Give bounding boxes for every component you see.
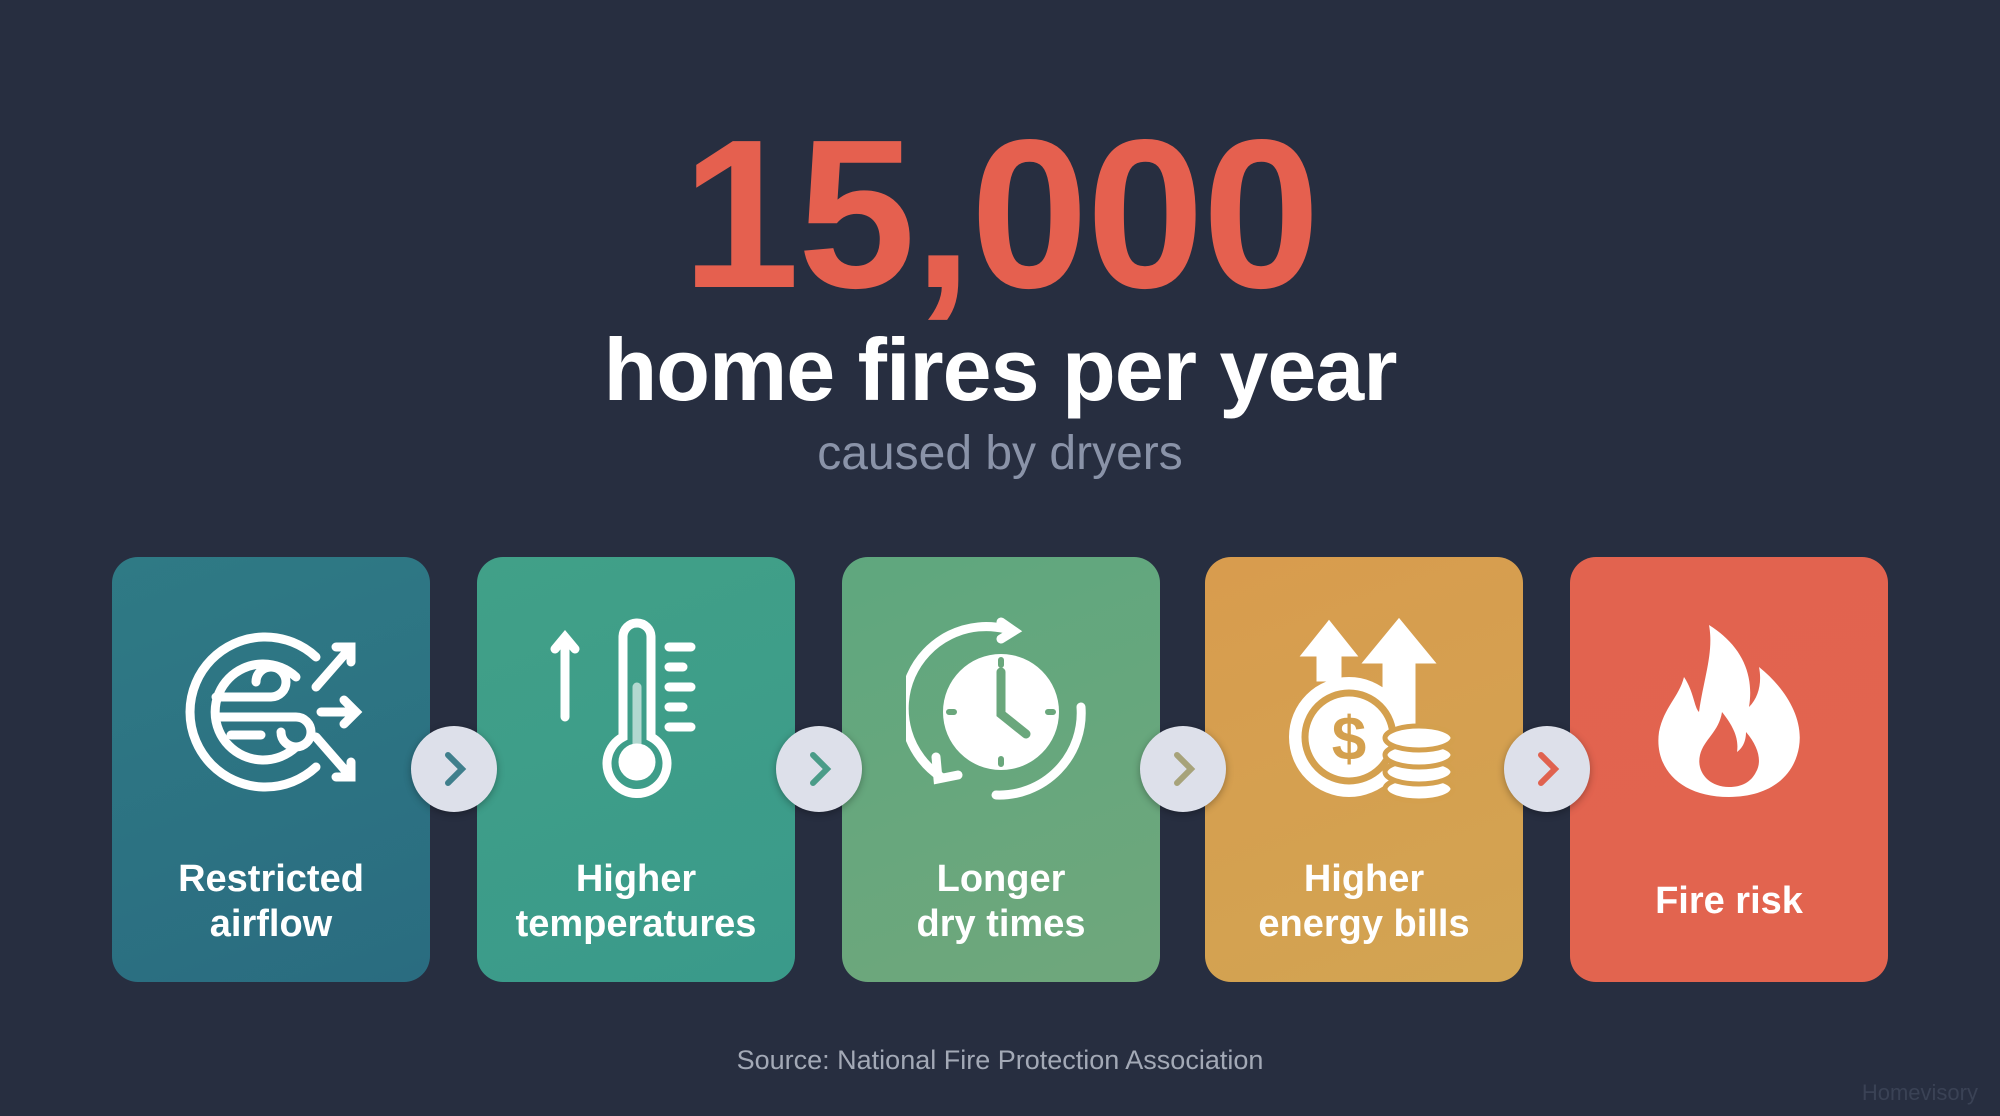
label: [917, 858, 1085, 945]
label: airflow: [210, 903, 332, 945]
label: [1258, 858, 1470, 945]
connector arrow 1: [411, 726, 497, 812]
label: temperatures: [516, 903, 756, 945]
label: energy bills: [1258, 903, 1470, 945]
connector arrow 4: [1504, 726, 1590, 812]
watermark: Homevisory: [1862, 1080, 1978, 1105]
label: Fire risk: [1655, 880, 1803, 922]
card: longer dry times: [842, 557, 1160, 982]
title number: 15,000: [682, 95, 1318, 332]
icon: coins with arrows: $: [1332, 705, 1366, 774]
icon: coins with arrows: [1289, 618, 1450, 798]
label: [178, 858, 364, 945]
label: [516, 858, 756, 945]
label: Higher: [576, 858, 696, 900]
source note: Source: National Fire Protection Association: [737, 1045, 1263, 1075]
connector arrow 2: [776, 726, 862, 812]
caption: caused by dryers: [817, 427, 1183, 480]
card: higher temperatures: [477, 557, 795, 982]
icon: thermometer: [550, 618, 696, 798]
label: Restricted: [178, 858, 364, 900]
label: Higher: [1304, 858, 1424, 900]
subtitle: home fires per year: [604, 320, 1396, 419]
icon: airflow: [186, 632, 362, 792]
card: restricted airflow: [112, 557, 430, 982]
label: dry times: [917, 903, 1085, 945]
connector arrow 3: [1140, 726, 1226, 812]
label: Longer: [937, 858, 1065, 900]
card: fire risk: [1570, 557, 1888, 982]
icon: clock: [906, 618, 1086, 800]
icon: flame: [1658, 625, 1800, 797]
card: higher energy bills: [1205, 557, 1523, 982]
